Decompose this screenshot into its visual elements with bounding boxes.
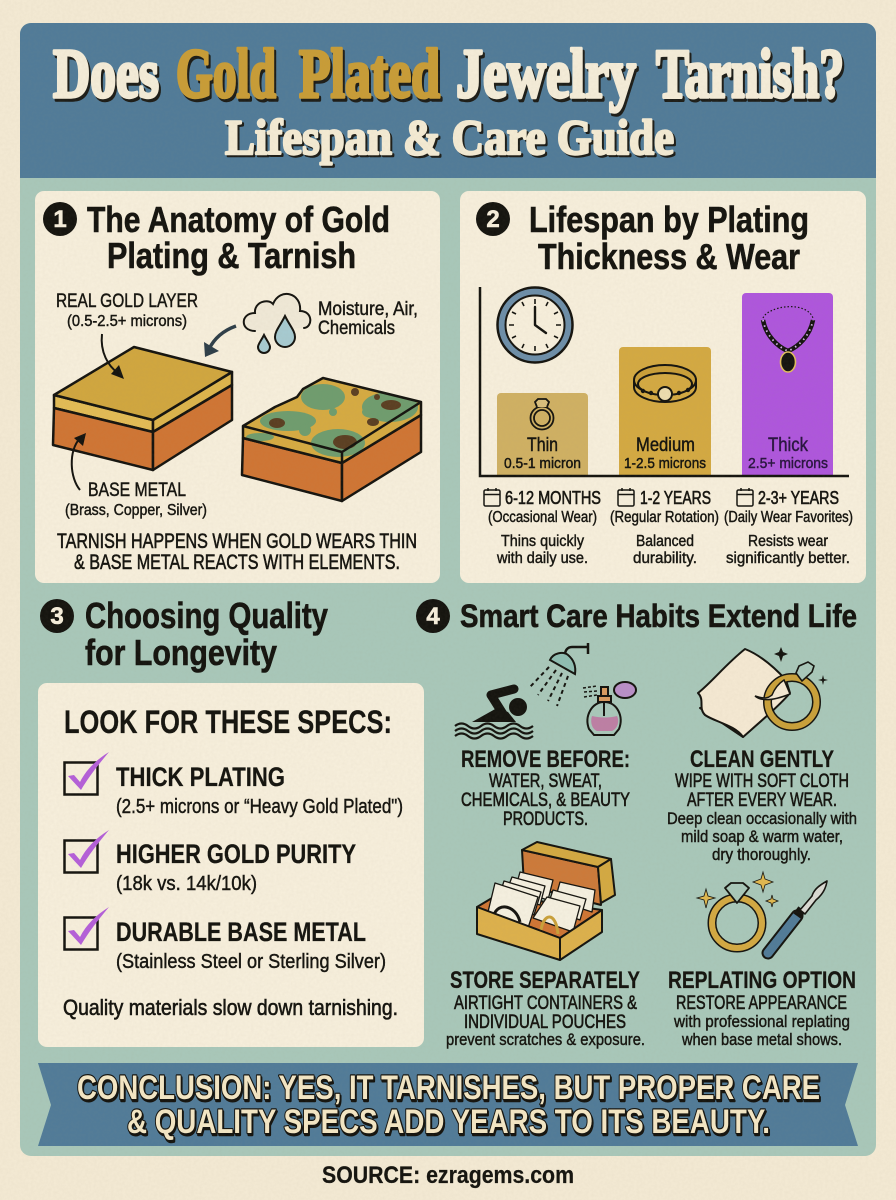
care text: PRODUCTS. <box>503 809 588 830</box>
icon: perfume <box>583 682 636 735</box>
bar: medium <box>619 347 711 476</box>
number badge 4 <box>416 599 450 633</box>
panel 2: lifespan chart <box>460 191 866 583</box>
care item: remove before <box>455 643 636 830</box>
bar: medium: 1-2.5 microns <box>624 455 706 472</box>
bar: thick: Thick <box>768 435 808 456</box>
arrow: gold layer pointer <box>102 334 124 379</box>
care text: dry thoroughly. <box>712 845 811 864</box>
column: medium lifespan: 1-2 YEARS <box>640 488 711 508</box>
column: medium lifespan: Balanced <box>636 533 694 550</box>
spec: base metal <box>64 907 386 973</box>
icon: checkbox <box>64 752 109 794</box>
spec: gold purity: HIGHER GOLD PURITY <box>116 839 356 869</box>
bar: thin: Thin <box>527 435 558 456</box>
explanation text: TARNISH HAPPENS WHEN GOLD WEARS THIN <box>57 530 417 553</box>
column: thin lifespan: Thins quickly <box>501 533 584 550</box>
column: medium lifespan: (Regular Rotation) <box>610 509 719 526</box>
heading 3: Choosing Quality <box>85 595 328 636</box>
checklist note: Quality materials slow down tarnishing. <box>63 995 398 1020</box>
care title: CLEAN GENTLY <box>690 746 834 773</box>
care text <box>667 771 857 864</box>
care text <box>461 771 630 830</box>
label: real gold layer: REAL GOLD LAYER <box>56 291 198 312</box>
care item: store separately <box>446 842 645 1049</box>
number badge 3 <box>40 599 74 633</box>
heading 3 <box>85 595 328 673</box>
column: thin lifespan: 6-12 MONTHS <box>505 488 601 508</box>
icon: bracelet <box>634 365 696 402</box>
tarnished block <box>242 378 421 501</box>
subtitle: Lifespan & Care Guide <box>225 109 674 165</box>
heading 1: Plating & Tarnish <box>107 235 356 276</box>
care text: RESTORE APPEARANCE <box>676 993 847 1014</box>
label: real gold layer: (0.5-2.5+ microns) <box>67 313 187 330</box>
column: thick lifespan <box>724 488 853 567</box>
conclusion text: & QUALITY SPECS ADD YEARS TO ITS BEAUTY. <box>127 1103 770 1141</box>
icon: calendar <box>484 488 500 506</box>
care item: clean gently <box>667 647 857 864</box>
bar: medium: Medium <box>636 435 695 456</box>
column: thick lifespan: significantly better. <box>726 550 850 567</box>
panel 1: anatomy of gold plating <box>35 191 440 583</box>
column: thick lifespan: Resists wear <box>748 533 829 550</box>
care text: mild soap & warm water, <box>681 827 843 846</box>
bar: thick <box>742 293 833 476</box>
heading 1 <box>87 199 390 276</box>
care title: STORE SEPARATELY <box>450 967 640 994</box>
icon: jewelry box <box>477 842 615 960</box>
source line: SOURCE: ezragems.com <box>322 1162 574 1189</box>
number badge 1: 1 <box>53 206 67 233</box>
column: thick lifespan: 2-3+ YEARS <box>758 488 839 508</box>
icon: checkbox <box>64 907 109 950</box>
icon: ring and replating tool <box>697 872 827 953</box>
tarnish blotches <box>246 384 418 457</box>
care text: AIRTIGHT CONTAINERS & <box>454 993 637 1014</box>
label: moisture, air, chemicals: Chemicals <box>318 318 395 339</box>
header band <box>20 23 876 178</box>
care text: with professional replating <box>673 1012 850 1031</box>
label: moisture, air, chemicals: Moisture, Air, <box>318 299 418 320</box>
section 3: choosing quality <box>38 595 424 1047</box>
number badge 4: 4 <box>426 603 440 630</box>
spec: thick plating: (2.5+ microns or “Heavy Gold Plated") <box>116 796 403 818</box>
bar: thin: 0.5-1 micron <box>504 455 581 472</box>
spec: base metal: DURABLE BASE METAL <box>116 917 366 947</box>
care text <box>673 993 850 1049</box>
title: Does <box>53 36 159 113</box>
care text: CHEMICALS, & BEAUTY <box>461 790 630 811</box>
heading 1: The Anatomy of Gold <box>87 199 390 240</box>
care text: Deep clean occasionally with <box>667 809 857 828</box>
column: thin lifespan: (Occasional Wear) <box>488 509 597 526</box>
icon: swimmer <box>455 689 533 738</box>
icon: checkbox <box>64 830 109 872</box>
number badge 1 <box>43 202 77 236</box>
label: base metal: (Brass, Copper, Silver) <box>65 502 207 519</box>
checklist heading: LOOK FOR THESE SPECS: <box>64 704 392 740</box>
icon: cloud with drops <box>244 294 310 353</box>
spec: thick plating <box>64 752 403 818</box>
care title: REMOVE BEFORE: <box>461 746 630 773</box>
care item: replating option <box>668 872 856 1049</box>
label: real gold layer <box>56 291 198 330</box>
care text: prevent scratches & exposure. <box>446 1030 645 1049</box>
care text: AFTER EVERY WEAR. <box>687 790 837 811</box>
title: Plated <box>299 36 440 113</box>
heading 2: Lifespan by Plating <box>529 199 809 240</box>
bar chart <box>480 287 849 476</box>
label: moisture, air, chemicals <box>318 299 418 339</box>
chart axes <box>480 287 849 476</box>
section 4: care habits <box>416 598 857 1049</box>
icon: clock <box>498 288 572 362</box>
icon: ring <box>530 399 554 430</box>
bar: thin <box>497 393 588 476</box>
panel: specs checklist <box>38 683 424 1047</box>
icon: shower <box>529 643 588 706</box>
number badge 2 <box>476 202 510 236</box>
title: Jewelry <box>456 36 636 113</box>
column: thick lifespan: (Daily Wear Favorites) <box>724 509 853 526</box>
spec: gold purity <box>64 830 356 895</box>
icon: necklace <box>763 307 813 372</box>
intact plated block <box>53 347 232 470</box>
column: thin lifespan <box>484 488 601 567</box>
icon: cloth and ring <box>698 647 828 737</box>
care text <box>446 993 645 1049</box>
conclusion text <box>77 1069 820 1141</box>
label: base metal <box>65 480 207 519</box>
title <box>53 36 844 113</box>
spec: base metal: (Stainless Steel or Sterling Silver) <box>116 951 386 973</box>
number badge 2: 2 <box>486 206 500 233</box>
care text: WIPE WITH SOFT CLOTH <box>675 771 849 792</box>
heading 2: Thickness & Wear <box>538 236 800 277</box>
heading 2 <box>529 199 809 277</box>
care text: when base metal shows. <box>681 1030 842 1049</box>
explanation text: & BASE METAL REACTS WITH ELEMENTS. <box>74 551 400 574</box>
explanation text <box>57 530 417 574</box>
spec: gold purity: (18k vs. 14k/10k) <box>116 873 257 895</box>
spec: thick plating: THICK PLATING <box>116 762 285 792</box>
icon: calendar <box>737 488 753 506</box>
heading 3: for Longevity <box>85 632 277 673</box>
number badge 3: 3 <box>50 603 64 630</box>
care text: WATER, SWEAT, <box>489 771 602 792</box>
bar: thick: 2.5+ microns <box>748 455 828 472</box>
conclusion banner <box>38 1063 858 1146</box>
arrow: base metal pointer <box>72 433 86 490</box>
title: Gold <box>176 36 276 113</box>
arrow: environment to block <box>204 326 236 357</box>
column: medium lifespan: durability. <box>633 550 697 567</box>
column: thin lifespan: with daily use. <box>496 550 588 567</box>
care text: INDIVIDUAL POUCHES <box>464 1012 626 1033</box>
icon: calendar <box>618 488 634 506</box>
column: medium lifespan <box>610 488 719 567</box>
label: base metal: BASE METAL <box>88 480 186 501</box>
